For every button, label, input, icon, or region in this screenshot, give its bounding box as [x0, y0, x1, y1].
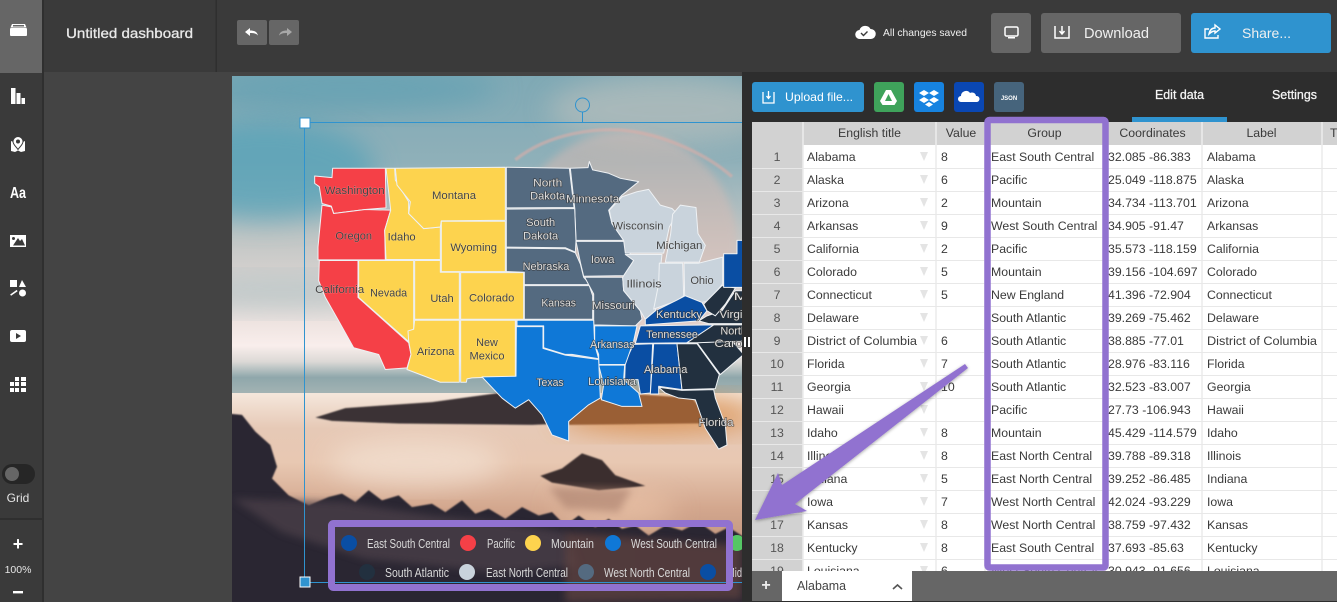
map labels: Wyoming — [450, 242, 497, 254]
zoom minus — [13, 591, 23, 593]
map labels — [315, 178, 764, 429]
row 3: 34.734 -113.701 — [1108, 196, 1197, 210]
row 17: 38.759 -97.432 — [1108, 518, 1191, 532]
row 12: 27.73 -106.943 — [1108, 403, 1191, 417]
zoom plus: + — [13, 534, 23, 554]
map labels: Virginia — [719, 309, 759, 321]
row 6 — [774, 267, 1256, 276]
row 1: Alabama — [807, 150, 856, 164]
map labels: Michigan — [656, 240, 702, 252]
row 16: 16 — [770, 495, 784, 509]
selection box with handles — [300, 98, 742, 587]
row 4: Arkansas — [1207, 219, 1258, 233]
row 1: 32.085 -86.383 — [1108, 150, 1191, 164]
row 6: Colorado — [807, 265, 857, 279]
row 12: 12 — [770, 403, 784, 417]
tab: settings: Settings — [1272, 88, 1317, 102]
icon: dashboard tray — [10, 24, 27, 36]
row 5: 2 — [941, 242, 948, 256]
row 9: South Atlantic — [991, 334, 1066, 348]
panel: top bar — [44, 0, 1337, 72]
background photo: lake at sunset — [232, 76, 742, 602]
row 7: New England — [991, 288, 1064, 302]
row 13: Mountain — [991, 426, 1042, 440]
row 8: 8 — [774, 311, 781, 325]
map labels: Florida — [698, 417, 734, 429]
map labels: Arkansas — [590, 339, 635, 351]
row 19: 30.943 -91.656 — [1108, 564, 1191, 578]
row 9: District of Columbia — [807, 334, 917, 348]
map labels: Missouri — [592, 300, 635, 312]
row 10: 28.976 -83.116 — [1108, 357, 1190, 371]
row 11: Georgia — [1207, 380, 1251, 394]
map labels: Illinois — [626, 278, 662, 290]
map group: South Atlantic states — [659, 286, 745, 449]
row 2: 2 — [774, 173, 781, 187]
row 7: 7 — [774, 288, 781, 302]
row 11: 10 — [941, 380, 955, 394]
row 13: 13 — [770, 426, 784, 440]
panel: left sidebar — [0, 0, 44, 602]
row 16: 7 — [941, 495, 948, 509]
row 7: 41.396 -72.904 — [1108, 288, 1191, 302]
map group: Pacific states — [315, 168, 411, 370]
icon: map pin — [11, 136, 25, 152]
row 15: 15 — [770, 472, 784, 486]
row 6: 5 — [941, 265, 948, 279]
row 7: Connecticut — [1207, 288, 1273, 302]
icon: drag handle — [744, 337, 750, 347]
row 12: Hawaii — [1207, 403, 1244, 417]
map labels: Mexico — [469, 350, 504, 362]
map of the United States — [315, 162, 764, 449]
icon: bar chart — [11, 88, 25, 104]
map labels: Washington — [325, 185, 385, 197]
row 9: 9 — [774, 334, 781, 348]
row 17 — [771, 520, 1248, 529]
data table — [752, 122, 1337, 578]
tab: edit data: Edit data — [1155, 88, 1204, 102]
row 19 — [771, 566, 1259, 571]
row 15: Indiana — [1207, 472, 1248, 486]
row 19: 19 — [770, 564, 784, 578]
row 8: 39.269 -75.462 — [1108, 311, 1191, 325]
share button: Share... — [1242, 25, 1291, 41]
row 11: 11 — [771, 380, 784, 394]
map labels: Iowa — [591, 254, 615, 266]
row 5: Pacific — [991, 242, 1027, 256]
row 7: 5 — [941, 288, 948, 302]
row 11 — [772, 382, 1251, 394]
row 2: Pacific — [991, 173, 1027, 187]
purple arrow to legend — [755, 364, 968, 520]
purple highlight: group column — [988, 120, 1106, 568]
icon: image — [10, 235, 26, 247]
chart legend: Pacific — [487, 536, 515, 551]
row 16: 42.024 -93.229 — [1108, 495, 1191, 509]
row 8: Delaware — [807, 311, 859, 325]
Dropbox button — [914, 82, 944, 112]
map group: West North Central states — [506, 162, 642, 326]
row 11: 32.523 -83.007 — [1108, 380, 1191, 394]
tab: edit data — [1132, 88, 1227, 122]
row 15: 39.252 -86.485 — [1108, 472, 1191, 486]
row 5: 35.573 -118.159 — [1108, 242, 1197, 256]
add sheet button: + — [761, 577, 771, 594]
map labels: Ma — [734, 291, 758, 303]
row 3: Mountain — [991, 196, 1042, 210]
Google Drive button — [874, 82, 904, 112]
row 14: 8 — [941, 449, 948, 463]
map labels: Minnesota — [566, 193, 620, 205]
icon: shapes — [10, 280, 26, 296]
row 4: 34.905 -91.47 — [1108, 219, 1184, 233]
map labels: South — [526, 217, 555, 229]
chart legend: West South Central — [631, 536, 717, 551]
chart legend: West North Central — [604, 565, 690, 580]
row 14: 14 — [770, 449, 784, 463]
map group: East South Central states — [625, 296, 714, 394]
row 9: 6 — [941, 334, 948, 348]
row 13: Idaho — [1207, 426, 1238, 440]
map labels: New — [476, 337, 498, 349]
row 15: 5 — [941, 472, 948, 486]
map labels: Nevada — [370, 287, 408, 299]
map labels: Dakota — [530, 190, 566, 202]
upload button — [752, 82, 864, 112]
row 5: 5 — [774, 242, 781, 256]
row 4: Arkansas — [807, 219, 858, 233]
row 9 — [774, 336, 1317, 345]
row 5: California — [807, 242, 859, 256]
zoom level: 100% — [5, 564, 31, 576]
map labels: California — [315, 284, 365, 296]
row 6: Mountain — [991, 265, 1042, 279]
label: grid: Grid — [7, 491, 29, 505]
row 8: South Atlantic — [991, 311, 1066, 325]
icon: text: Aa — [10, 185, 26, 202]
row 15: East North Central — [991, 472, 1092, 486]
row 18: 37.693 -85.63 — [1108, 541, 1184, 555]
chart legend: Middle Atlantic — [727, 565, 787, 580]
row 12 — [771, 405, 1244, 414]
map labels: Tennessee — [646, 329, 698, 341]
table header: Value — [946, 126, 976, 140]
row 14: East North Central — [991, 449, 1092, 463]
row 18: Kentucky — [807, 541, 858, 555]
map labels: North — [533, 178, 562, 190]
row 3: 3 — [774, 196, 781, 210]
JSON button: JSON — [1001, 96, 1017, 102]
row 18 — [771, 543, 1258, 554]
sheet tab: Alabama: Alabama — [797, 579, 846, 593]
row 4: 9 — [941, 219, 948, 233]
chart legend: South Atlantic — [385, 565, 449, 580]
row 2: Alaska — [807, 173, 844, 187]
row 15 — [771, 474, 1248, 483]
purple highlight: legend — [332, 524, 730, 588]
row 18: 18 — [770, 541, 784, 555]
row 10: Florida — [1207, 357, 1245, 371]
row 13 — [771, 428, 1238, 437]
row 17: Kansas — [1207, 518, 1248, 532]
row 2: 6 — [941, 173, 948, 187]
row 3 — [774, 198, 1249, 207]
panel: canvas background — [44, 72, 745, 602]
row 16 — [808, 497, 1233, 506]
save status: All changes saved — [883, 27, 967, 39]
row 18: 8 — [941, 541, 948, 555]
map labels: Kentucky — [656, 309, 702, 321]
map labels: Montana — [432, 190, 477, 202]
row 10: 10 — [770, 357, 784, 371]
JSON button — [994, 82, 1024, 112]
undo button — [237, 20, 267, 45]
icon: cloud saved — [855, 26, 876, 39]
row 12: Pacific — [991, 403, 1027, 417]
map labels: Utah — [430, 293, 454, 305]
map group: West South Central states — [482, 320, 642, 441]
row 10 — [771, 359, 1245, 368]
row 15: Indiana — [807, 472, 848, 486]
row 11: South Atlantic — [991, 380, 1066, 394]
sheet tabs bar — [752, 571, 1337, 601]
row 7: Connecticut — [807, 288, 873, 302]
chart legend — [341, 535, 742, 580]
map group: Mountain states — [359, 167, 524, 382]
row 6: 39.156 -104.697 — [1108, 265, 1198, 279]
row 3: 2 — [941, 196, 948, 210]
row 2 — [774, 175, 1244, 184]
row 14: 39.788 -89.318 — [1108, 449, 1191, 463]
upload button: Upload file... — [785, 90, 853, 104]
dashboard title: Untitled dashboard — [66, 25, 193, 41]
row 1: 1 — [774, 150, 781, 164]
row 10: South Atlantic — [991, 357, 1066, 371]
row 19: Louisiana — [807, 564, 860, 578]
row 9: 38.885 -77.01 — [1108, 334, 1184, 348]
row 3: Arizona — [807, 196, 849, 210]
row 14: Illinois — [1207, 449, 1241, 463]
map labels: Nebraska — [523, 261, 570, 273]
map labels: Carolina — [714, 338, 764, 350]
table header: English title — [838, 126, 901, 140]
row 17: 8 — [941, 518, 948, 532]
row 10: Florida — [807, 357, 845, 371]
map labels: Louisiana — [588, 376, 637, 388]
preview button — [991, 13, 1031, 53]
row 14: Illinois — [807, 449, 841, 463]
map labels: Kansas — [541, 297, 576, 309]
row 5: California — [1207, 242, 1259, 256]
row 8 — [774, 313, 1258, 322]
row 6: Colorado — [1207, 265, 1257, 279]
row 14 — [771, 451, 1241, 460]
icon: grid — [10, 377, 26, 392]
map labels: Alabama — [644, 364, 688, 376]
row 19: Louisiana — [1207, 564, 1260, 578]
row 19: West South Central — [991, 564, 1097, 578]
download button — [1041, 13, 1181, 53]
row 4: West South Central — [991, 219, 1097, 233]
row 11: Georgia — [807, 380, 851, 394]
row 18: East South Central — [991, 541, 1094, 555]
table header: Group — [1027, 126, 1062, 140]
map labels: Texas — [536, 377, 564, 389]
row 1: East South Central — [991, 150, 1094, 164]
row 19: 6 — [941, 564, 948, 578]
row 18: Kentucky — [1207, 541, 1258, 555]
row 13: Idaho — [807, 426, 838, 440]
row 13: 8 — [941, 426, 948, 440]
table header: Label — [1246, 126, 1277, 140]
table header: Coordinates — [1119, 126, 1186, 140]
map labels: Ohio — [690, 275, 714, 287]
chart legend: Mountain — [551, 536, 594, 551]
download button: Download — [1084, 26, 1149, 42]
row 6: 6 — [774, 265, 781, 279]
row 1 — [774, 152, 1256, 161]
map labels: North — [720, 325, 747, 337]
row 1: Alabama — [1207, 150, 1256, 164]
row 5 — [774, 244, 1259, 253]
row 17: Kansas — [807, 518, 848, 532]
sheet tab: Alabama — [782, 571, 912, 601]
row 16: Iowa — [807, 495, 833, 509]
row 16: Iowa — [1207, 495, 1233, 509]
chart legend: East North Central — [486, 565, 568, 580]
row 3: Arizona — [1207, 196, 1249, 210]
row 9: District of Columbia — [1207, 334, 1317, 348]
toggle: grid — [2, 464, 35, 484]
row 7 — [774, 290, 1272, 302]
toolbar: data sources — [752, 82, 1317, 122]
map labels: Idaho — [388, 231, 416, 243]
row 8: Delaware — [1207, 311, 1259, 325]
row 4: 4 — [774, 219, 781, 233]
map labels: Dakota — [523, 230, 559, 242]
OneDrive button — [954, 82, 984, 112]
row 13: 45.429 -114.579 — [1108, 426, 1197, 440]
row 16: West North Central — [991, 495, 1095, 509]
row 12: Hawaii — [807, 403, 844, 417]
row 17: 17 — [770, 518, 784, 532]
map group: Mid-Atlantic states — [724, 240, 745, 287]
row 10: 7 — [941, 357, 948, 371]
redo button — [269, 20, 299, 45]
map group: East North Central states — [609, 189, 723, 319]
map labels: Wisconsin — [612, 221, 663, 233]
map labels: Arizona — [417, 346, 455, 358]
row 4 — [774, 221, 1258, 230]
map labels: Oregon — [335, 231, 372, 243]
row 2: 25.049 -118.875 — [1108, 173, 1197, 187]
share button — [1191, 13, 1331, 53]
table header — [839, 128, 1337, 140]
chart legend: East South Central — [367, 536, 450, 551]
map labels: Colorado — [469, 292, 514, 304]
row 17: West North Central — [991, 518, 1095, 532]
icon: video — [10, 330, 26, 342]
row 1: 8 — [941, 150, 948, 164]
row 2: Alaska — [1207, 173, 1244, 187]
panel: data editor background — [742, 72, 1337, 602]
